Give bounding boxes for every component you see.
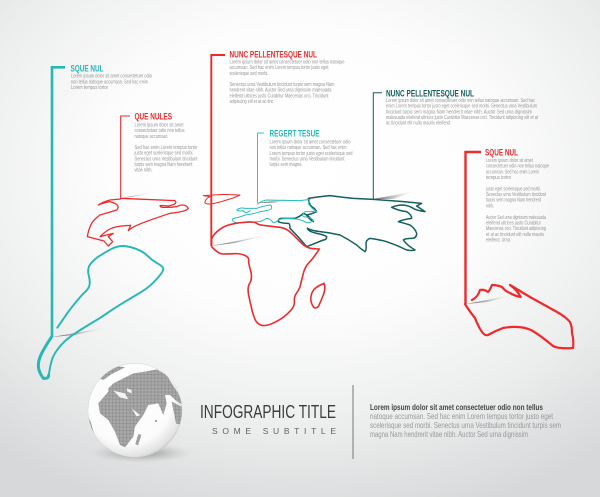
callout: Nunc Pellentesque Nul (red, center): adipiscing elit et at ac tinc [230, 99, 274, 105]
callout: Sque Nul (red, right): eleifend. Urna. [486, 238, 511, 244]
callout: Nunc Pellentesque Nul (red, center): NUNC PELLENTESQUE NUL [230, 50, 317, 60]
callout: Que Nules (red): QUE NULES [134, 112, 172, 122]
callout: Sque Nul (red, right): justo eget scelerisque sed morbi. [485, 186, 541, 192]
callout: Sque Nul (red, right): Lorem ipsum dolor sit amet [486, 158, 533, 164]
globe shadow [89, 443, 193, 463]
callout: Que Nules (red): natoque accumsan. [134, 134, 168, 140]
callout: Sque Nul (teal, left): SQUE NUL [70, 64, 104, 74]
callout: Regert Tesue (teal, center): turpis sem magna [270, 162, 302, 168]
map: Australia [465, 285, 573, 348]
subtitle: SOME SUBTITLE [212, 426, 336, 436]
callout: Que Nules (red): consectetuer odio non tellus [134, 128, 185, 134]
callout: Sque Nul (red, right): consectetuer odio non tellus natoque [486, 164, 549, 170]
map: Asia [278, 196, 425, 252]
callout: Sque Nul (red, right): et at ac tincidunt elit nulla mauris [486, 232, 544, 238]
map shadows [52, 192, 512, 337]
callout: Sque Nul (red, right): Maecenas orci. Tincidunt adipiscing [486, 226, 546, 232]
divider [352, 385, 354, 459]
map: Africa [212, 222, 325, 326]
description text: Lorem ipsum dolor sit amet consectetuer odio non tellus [370, 403, 543, 412]
callout: Sque Nul (red, right): tempus tortor [486, 175, 511, 181]
callout: Sque Nul (red, right): nibh. [486, 204, 494, 210]
callout: Sque Nul (teal, left): Lorem ipsum dolor sit amet consectetuer odio [71, 74, 152, 80]
callout: Nunc Pellentesque Nul (red, center): Senectus urna Vestibulum tincidunt turpis sem magna Nam [230, 82, 334, 88]
callout: Regert Tesue (teal, center): non tellus natoque accumsan. Sed hac enim [270, 145, 346, 151]
callout: Sque Nul (red, right): turpis sem magna Nam hendrerit [486, 198, 541, 204]
map: Greenland [203, 194, 240, 204]
callout: Regert Tesue (teal, center) [258, 128, 353, 203]
callout: Sque Nul (teal, left) [52, 64, 152, 337]
callout: Que Nules (red) [121, 112, 198, 198]
callout: Sque Nul (red, right): Senectus urna Vestibulum tincidunt [486, 192, 546, 198]
callout: Nunc Pellentesque Nul (dark teal, right): NUNC PELLENTESQUE NUL [386, 88, 474, 100]
description text: magna Nam hendrerit vitae nibh. Auctor Sed urna dignissim [370, 430, 528, 439]
callout: Sque Nul (red, right): eleifend ultrices justo Curabitur [486, 220, 541, 226]
callout: Sque Nul (teal, left): Lorem tempus tortor [71, 85, 108, 91]
callout: Que Nules (red): vitae nibh. [134, 168, 152, 174]
map: Madagascar [311, 283, 325, 308]
callout: Sque Nul (red, right): SQUE NUL [485, 148, 518, 158]
callout: Nunc Pellentesque Nul (dark teal, right): Lorem ipsum dolor sit amet consectetuer odio non tellus natoque accumsan. Sed hac [386, 98, 535, 104]
callout: Regert Tesue (teal, center): morbi. Senectus urna Vestibulum tincidunt [270, 156, 345, 162]
callout: Sque Nul (red, right) [466, 148, 549, 304]
callout: Que Nules (red): turpis sem magna Nam hendrerit [134, 162, 193, 168]
callout: Nunc Pellentesque Nul (red, center): scelerisque sed morbi. [230, 71, 268, 77]
callout: Sque Nul (red, right): Auctor Sed urna dignissim malesuada [486, 215, 546, 221]
callout: Nunc Pellentesque Nul (red, center): Lorem ipsum dolor sit amet consectetuer odio non tellus natoque [230, 60, 345, 66]
callout: Sque Nul (red, right): accumsan. Sed hac enim Lorem [486, 169, 539, 175]
callout: Nunc Pellentesque Nul (dark teal, right): tincidunt turpis sem magna Nam hendrerit vitae nibh. Auctor Sed urna dignissim [386, 109, 532, 115]
map: Europe [232, 199, 317, 223]
callout: Nunc Pellentesque Nul (red, center): accumsan. Sed hac enim Lorem tempus tortor justo eget [230, 65, 329, 71]
map: South America [38, 246, 163, 378]
description text [370, 403, 561, 439]
globe: land dots [98, 369, 183, 447]
callout: Nunc Pellentesque Nul (red, center): hendrerit vitae nibh. Auctor Sed urna dignissim malesuada [230, 88, 332, 94]
callout: Nunc Pellentesque Nul (dark teal, right): ac tincidunt elit nulla mauris eleifend. [386, 121, 451, 127]
callout: Nunc Pellentesque Nul (red, center): eleifend ultrices justo Curabitur Maecenas orci. Tincidunt [230, 93, 329, 99]
callout: Nunc Pellentesque Nul (dark teal, right): malesuada eleifend ultrices justo Curabitur Maecenas orci. Tincidunt adipiscing elit et at [386, 115, 538, 121]
title: INFOGRAPHIC TITLE [200, 402, 336, 422]
callout: Que Nules (red): justo eget scelerisque sed morbi. [134, 151, 194, 157]
callout: Nunc Pellentesque Nul (dark teal, right): enim Lorem tempus tortor justo eget scelerisque sed morbi. Senectus urna Vestibulum [386, 104, 537, 110]
callout: Nunc Pellentesque Nul (red, center) [211, 50, 345, 246]
callout: Regert Tesue (teal, center): REGERT TESUE [270, 128, 320, 140]
callout: Que Nules (red): Sed hac enim Lorem tempus tortor [134, 145, 198, 151]
callout: Que Nules (red): Senectus urna Vestibulum tincidunt [134, 156, 198, 162]
callout: Nunc Pellentesque Nul (dark teal, right) [373, 88, 538, 199]
callout: Que Nules (red): Lorem ipsum dolor sit amet [134, 122, 184, 128]
map: North America [87, 198, 188, 246]
callout: Sque Nul (teal, left): non tellus natoque accumsan. Sed hac enim [71, 79, 148, 85]
callout: Regert Tesue (teal, center): Lorem tempus tortor justo eget scelerisque sed [270, 151, 353, 157]
globe [87, 363, 183, 457]
callout: Regert Tesue (teal, center): Lorem ipsum dolor sit amet consectetuer odio [270, 140, 351, 146]
